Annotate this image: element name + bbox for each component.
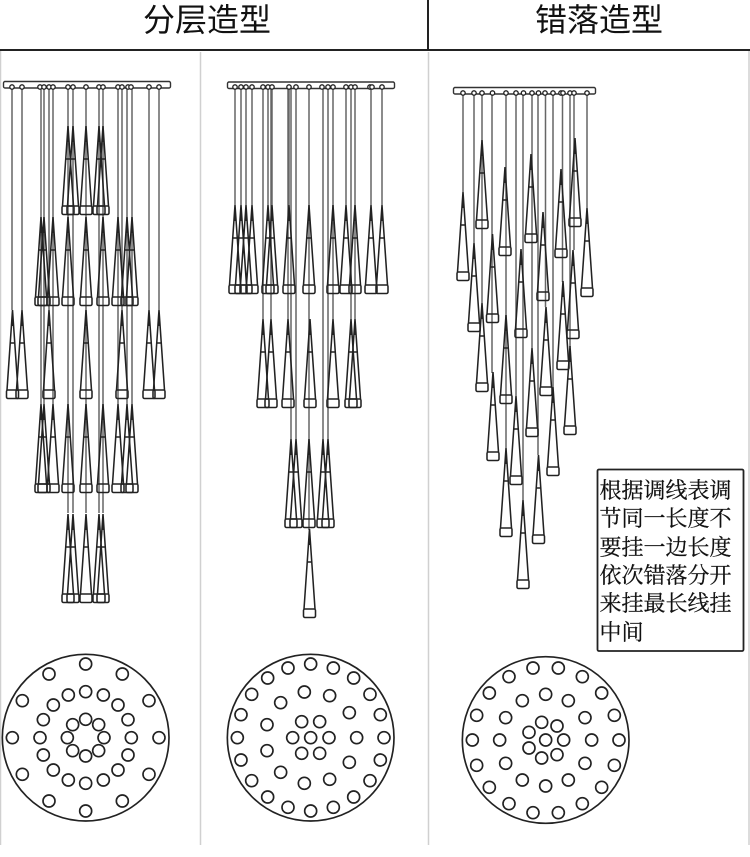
pendant tier 3 — [6, 310, 165, 398]
callout: hanging instructions: 节同一长度不 — [600, 506, 732, 531]
callout: hanging instructions: 中间 — [600, 620, 644, 645]
layout diagram: staggered — [462, 657, 629, 823]
pendant tier 1 — [62, 126, 109, 214]
pendant tier 4 — [35, 404, 138, 492]
chandelier: staggered style — [454, 88, 596, 588]
wires — [463, 94, 587, 500]
heading: staggered style: 错落造型 — [535, 2, 663, 38]
callout: hanging instructions: 根据调线表调 — [600, 478, 732, 503]
heading: layered style: 分层造型 — [143, 2, 271, 38]
callout: hanging instructions: 依次错落分开 — [600, 563, 732, 588]
chandelier: layered style, four tiers — [228, 82, 394, 618]
ceiling rail — [4, 82, 170, 88]
callout: hanging instructions: 来挂最长线挂 — [600, 591, 732, 616]
staggered pendants — [457, 138, 593, 588]
pendant tier 2 — [257, 319, 361, 408]
ceiling rail — [228, 82, 394, 88]
pendant tier 4 — [304, 529, 316, 618]
layout diagram: layered five tiers — [2, 654, 169, 821]
pendant tier 1 — [229, 205, 388, 294]
callout: hanging instructions: 要挂一边长度 — [600, 535, 732, 560]
chandelier: layered style, five tiers — [4, 82, 170, 602]
layout diagram: layered four tiers — [227, 654, 394, 821]
hooks — [461, 91, 589, 95]
ceiling rail — [454, 88, 596, 94]
pendant tier 2 — [35, 217, 138, 306]
wires — [12, 88, 159, 513]
hooks — [233, 85, 384, 89]
callout: hanging instructions — [598, 470, 744, 651]
wires — [235, 88, 382, 530]
pendant tier 5 — [62, 514, 109, 602]
pendant tier 3 — [285, 439, 334, 528]
hooks — [10, 85, 161, 89]
